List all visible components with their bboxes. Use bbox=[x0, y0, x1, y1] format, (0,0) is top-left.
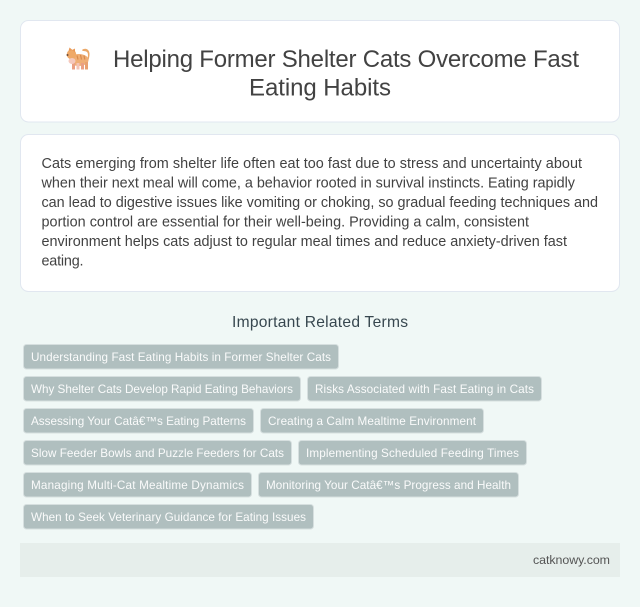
description line 2: when their next meal will come, a behavior rooted in survival instincts. Eating rapidly bbox=[40, 176, 576, 192]
tag: Why Shelter Cats Develop Rapid Eating Behaviors bbox=[31, 383, 293, 396]
heading: related terms: Important Related Terms bbox=[232, 314, 408, 331]
tag: Slow Feeder Bowls and Puzzle Feeders for Cats bbox=[31, 447, 284, 460]
tag: Creating a Calm Mealtime Environment bbox=[268, 415, 477, 428]
description line 3: can lead to digestive issues like vomiting or choking, so gradual feeding techniques and bbox=[42, 195, 598, 211]
tag bbox=[24, 440, 292, 465]
footer bar bbox=[20, 543, 620, 577]
tag bbox=[298, 440, 526, 465]
tag: Implementing Scheduled Feeding Times bbox=[306, 447, 519, 460]
tag bbox=[260, 408, 484, 433]
tag: Risks Associated with Fast Eating in Cats bbox=[315, 383, 534, 396]
tag bbox=[24, 472, 252, 497]
footer site name: catknowy.com bbox=[533, 553, 610, 567]
tag: Monitoring Your Catâ€™s Progress and Health bbox=[266, 479, 511, 492]
icon: orange cat bbox=[66, 48, 90, 70]
tag bbox=[24, 376, 300, 401]
tag: Managing Multi-Cat Mealtime Dynamics bbox=[31, 479, 244, 492]
related terms tags bbox=[24, 344, 542, 529]
tag bbox=[308, 376, 542, 401]
tag bbox=[24, 504, 314, 529]
tag bbox=[24, 408, 254, 433]
description line 4: portion control are essential for their well-being. Providing a calm, consistent bbox=[42, 214, 529, 230]
description line 5: environment helps cats adjust to regular meal times and reduce anxiety-driven fast bbox=[42, 234, 567, 250]
panel: title card bbox=[20, 20, 620, 122]
panel: description card bbox=[20, 134, 620, 292]
tag bbox=[24, 344, 338, 369]
tag: Understanding Fast Eating Habits in Former Shelter Cats bbox=[31, 351, 331, 364]
tag bbox=[258, 472, 518, 497]
description line 6: eating. bbox=[42, 254, 84, 270]
tag: Assessing Your Catâ€™s Eating Patterns bbox=[31, 415, 246, 428]
title line 2: Eating Habits bbox=[249, 74, 391, 102]
tag: When to Seek Veterinary Guidance for Eating Issues bbox=[31, 511, 306, 524]
title line 1: Helping Former Shelter Cats Overcome Fast bbox=[113, 46, 579, 73]
description line 1: Cats emerging from shelter life often eat too fast due to stress and uncertainty about bbox=[42, 156, 582, 172]
